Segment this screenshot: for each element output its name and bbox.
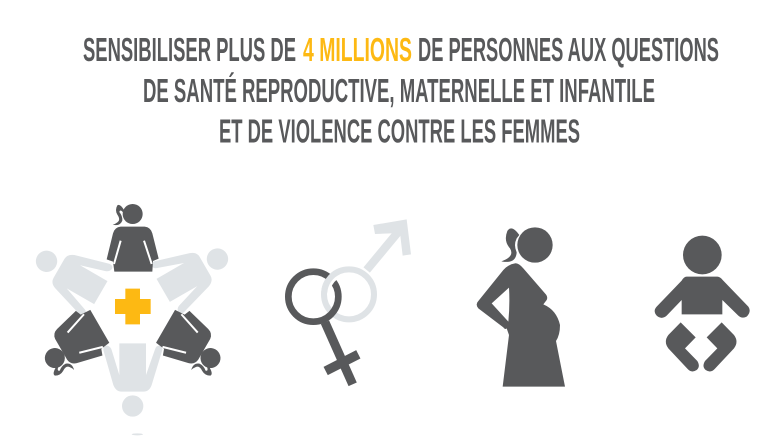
figure: woman top — [107, 204, 159, 272]
title line 1 — [83, 31, 719, 68]
figure: woman lower left — [41, 304, 113, 380]
female symbol — [288, 272, 358, 384]
torso and arms — [655, 277, 750, 318]
title line 1: SENSIBILISER PLUS DE — [83, 31, 296, 68]
interlock overlap — [326, 276, 335, 292]
figure: man upper left — [22, 231, 115, 318]
small fragment below — [132, 433, 143, 435]
left leg — [666, 322, 699, 371]
highlighted figure: 4 MILLIONS — [303, 31, 412, 68]
icon: yellow cross — [115, 289, 151, 324]
icon: female and male symbols interlocked — [288, 219, 411, 384]
title — [83, 31, 719, 150]
figure: man bottom — [103, 343, 162, 417]
male symbol — [324, 219, 411, 319]
figure: woman lower right — [152, 304, 224, 380]
body — [477, 263, 565, 387]
ponytail — [501, 228, 519, 262]
right leg — [703, 322, 736, 371]
figure: man upper right — [148, 228, 241, 316]
icon: baby — [655, 236, 750, 371]
head — [683, 236, 722, 274]
icon: circle of people around a medical cross — [22, 204, 241, 435]
icon: pregnant woman — [477, 227, 565, 387]
head — [517, 227, 553, 263]
